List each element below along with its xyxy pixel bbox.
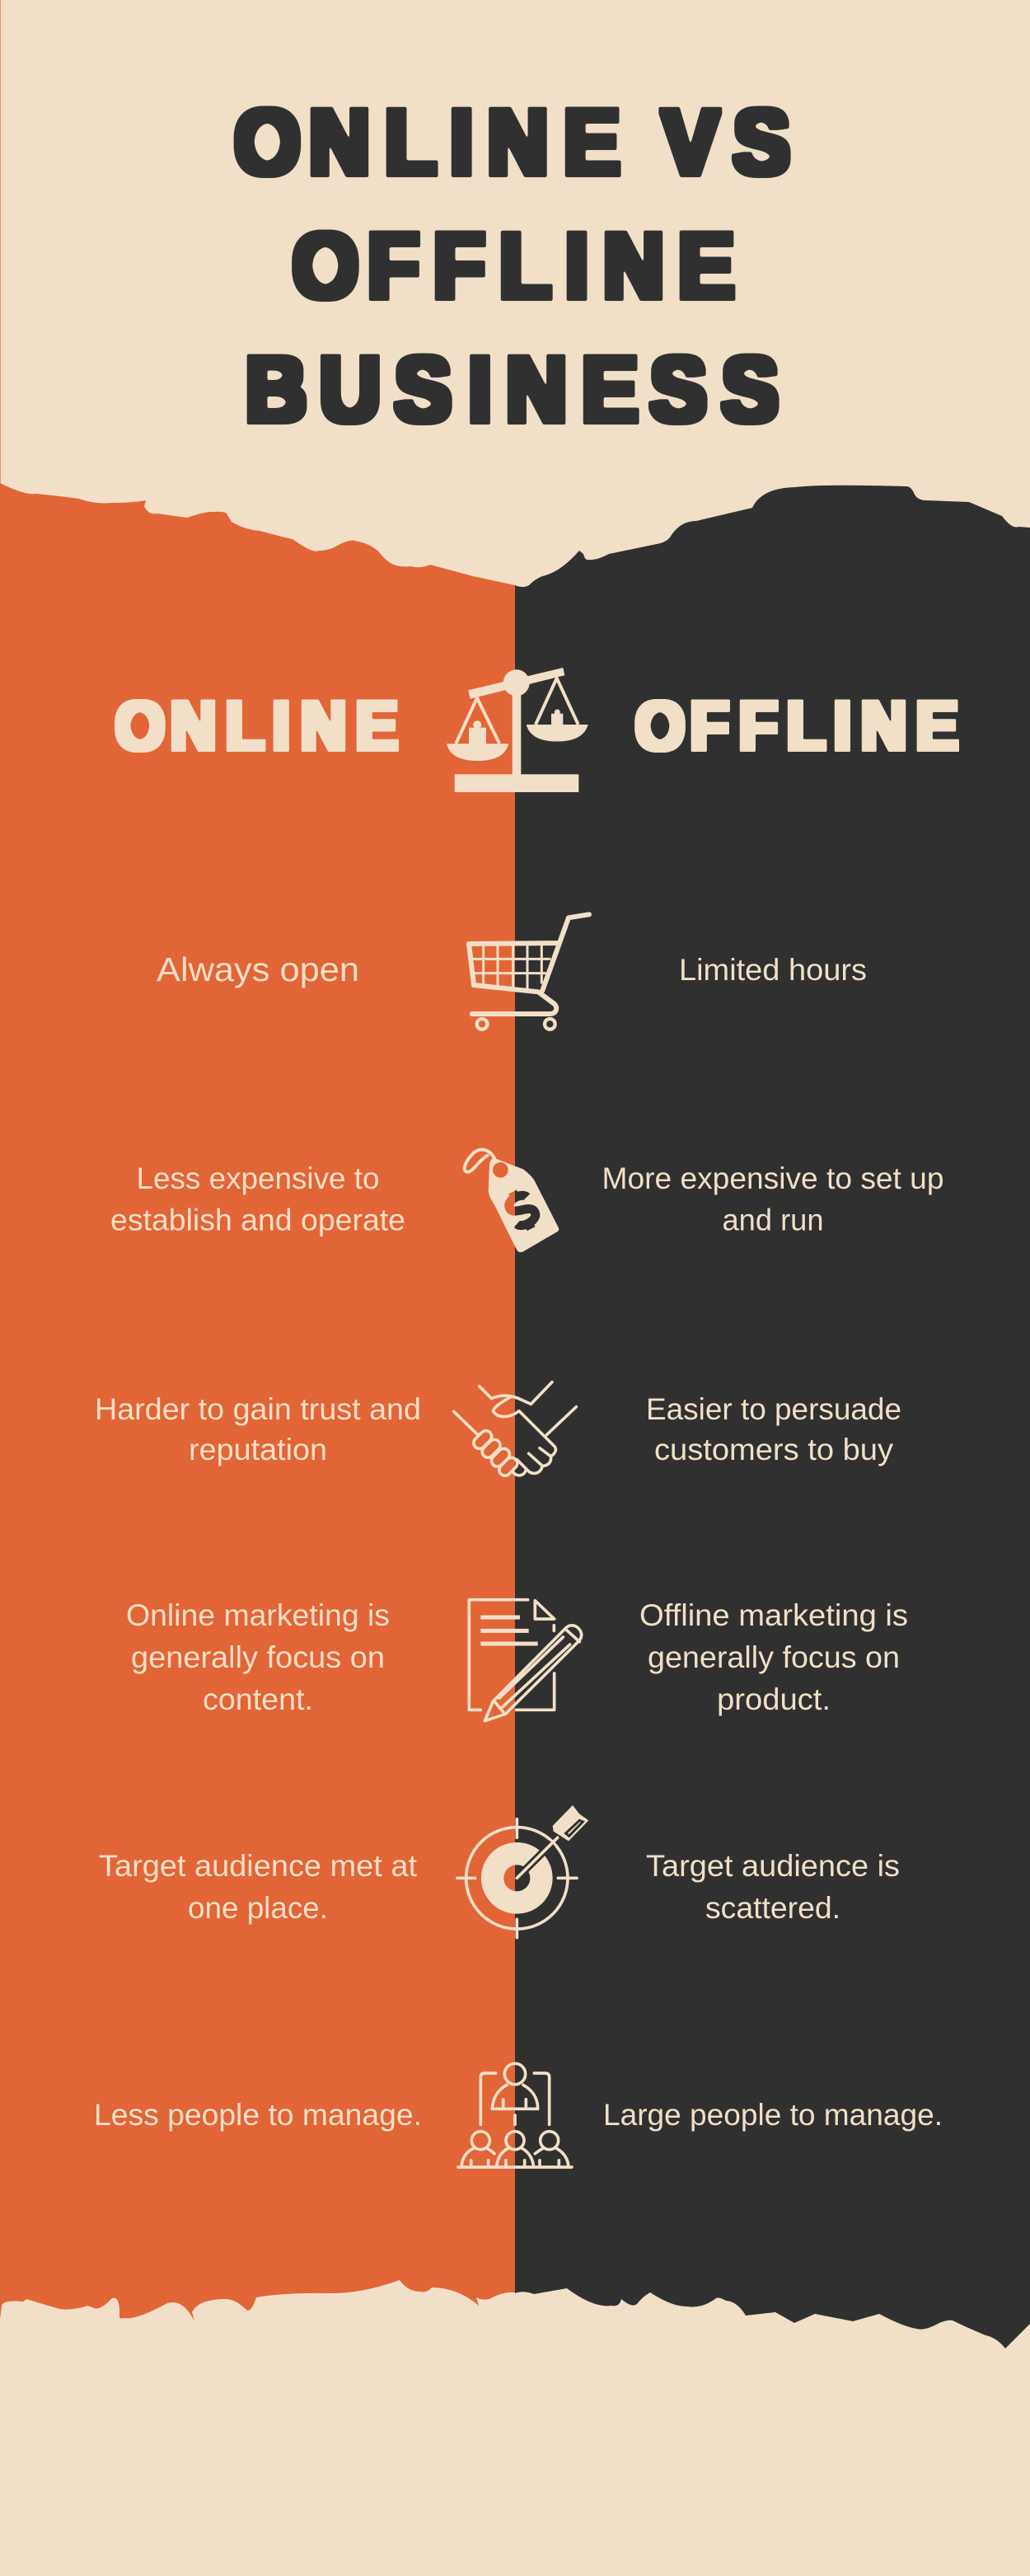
icon: shopping cart	[469, 914, 589, 1030]
row 5: offline text: Target audience is	[646, 1848, 900, 1883]
row 1: online text: Always open	[157, 950, 359, 988]
title	[234, 91, 790, 441]
title: ONLINE VS	[234, 91, 790, 194]
icon: target with arrow	[457, 1805, 588, 1938]
row 5: offline text	[646, 1848, 900, 1925]
row 4: online text: content.	[203, 1682, 313, 1716]
row 6: offline text: Large people to manage.	[603, 2097, 943, 2132]
row 2: online text: Less expensive to	[137, 1161, 379, 1195]
row 4: online text: Online marketing is	[126, 1598, 390, 1632]
row 2: offline text: and run	[722, 1202, 824, 1236]
panel: online orange column	[0, 483, 515, 2321]
row 5: offline text: scattered.	[705, 1890, 840, 1925]
title: BUSINESS	[246, 338, 779, 441]
row 4: offline text: generally focus on	[648, 1640, 900, 1674]
panel: offline dark column	[515, 486, 1030, 2348]
row 2: offline text	[602, 1161, 944, 1236]
row 3: online text	[95, 1391, 421, 1466]
icon: price tag	[465, 1150, 559, 1252]
row 2: offline text: More expensive to set up	[602, 1161, 944, 1195]
row 6: online text: Less people to manage.	[94, 2097, 422, 2132]
row 3: online text: Harder to gain trust and	[95, 1391, 421, 1426]
row 3: offline text	[646, 1391, 901, 1466]
row 4: online text: generally focus on	[131, 1640, 385, 1674]
row 2: online text: establish and operate	[110, 1202, 405, 1236]
heading: online: ONLINE	[115, 687, 398, 765]
heading: offline: OFFLINE	[635, 687, 958, 765]
icon: document and pencil	[469, 1600, 582, 1721]
row 3: offline text: Easier to persuade	[646, 1391, 901, 1426]
icon: handshake	[454, 1382, 576, 1478]
icon: team of people	[458, 2063, 572, 2167]
row 5: online text: Target audience met at	[99, 1848, 418, 1883]
row 4: online text	[126, 1598, 390, 1716]
row 4: offline text: Offline marketing is	[639, 1598, 908, 1632]
row 4: offline text	[639, 1598, 908, 1716]
row 3: online text: reputation	[189, 1432, 327, 1466]
icon: balance scale	[447, 668, 588, 792]
title: OFFLINE	[293, 214, 734, 317]
row 3: offline text: customers to buy	[654, 1432, 893, 1466]
row 1: offline text: Limited hours	[679, 952, 867, 987]
row 4: offline text: product.	[717, 1682, 831, 1716]
row 5: online text: one place.	[188, 1890, 328, 1925]
row 5: online text	[99, 1848, 418, 1925]
row 2: online text	[110, 1161, 405, 1236]
